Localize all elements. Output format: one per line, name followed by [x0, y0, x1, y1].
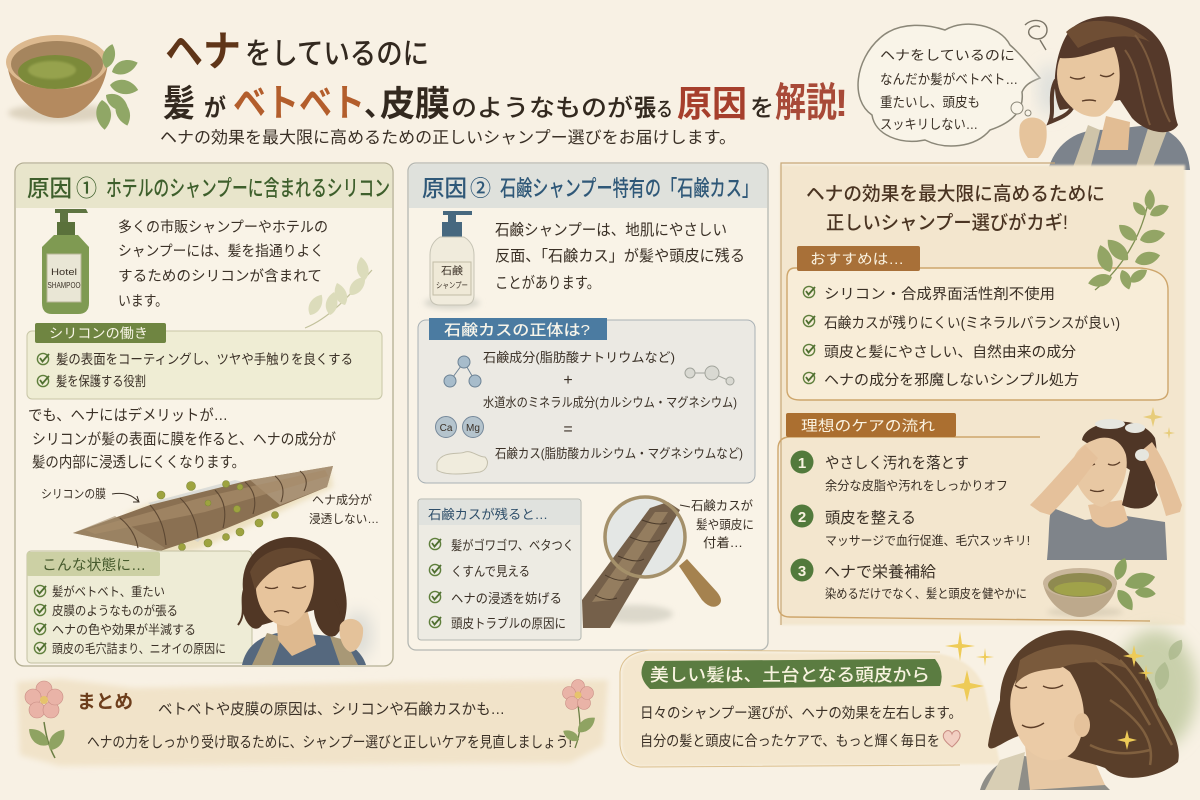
step 3: ヘナで栄養補給	[824, 563, 937, 581]
callout: not permeating	[309, 492, 379, 526]
box: symptoms: こんな状態に…	[42, 557, 146, 574]
icon: small henna bowl	[1043, 556, 1157, 617]
title: 髪	[163, 83, 195, 124]
text block: demerit	[28, 406, 336, 471]
text block: summary: ヘナの力をしっかり受け取るために、シャンプー選びと正しいケアを見直しましょう!	[87, 734, 572, 751]
icon: worried woman	[238, 537, 372, 665]
diagram: magnifying glass on hair	[582, 497, 754, 628]
tag: beautiful hair	[641, 659, 942, 689]
icon: calcium and magnesium	[436, 416, 484, 438]
callout: soap scum sticks: 付着…	[703, 535, 743, 550]
icon: henna bowl with leaves	[6, 35, 140, 130]
title	[163, 28, 848, 125]
icon: hotel shampoo bottle: SHAMPOO	[48, 281, 80, 290]
subtitle: ヘナの効果を最大限に高めるための正しいシャンプー選びをお届けします。	[160, 128, 736, 147]
formula: =	[563, 421, 573, 438]
tag: ideal care flow: 理想のケアの流れ	[801, 418, 936, 435]
step 3: 3	[798, 563, 806, 580]
icon: hotel shampoo bottle	[42, 209, 89, 314]
icon: pink flower	[25, 681, 69, 758]
heading: cause 1: ホテルのシャンプーに含まれるシリコン	[106, 176, 390, 201]
box: what soap scum is	[418, 318, 755, 483]
icon: soap scum lump	[437, 452, 487, 474]
heading: cause 1: 原因	[27, 175, 72, 201]
panel: beautiful hair message	[620, 650, 1000, 767]
list: silicone function: 髪を保護する役割	[56, 374, 146, 389]
text block: intro	[118, 218, 328, 310]
text block: summary: ベトベトや皮膜の原因は、シリコンや石鹸カスかも…	[158, 701, 505, 718]
heading: choosing shampoo: 正しいシャンプー選びがカギ!	[826, 212, 1068, 234]
text block: message: 自分の髪と頭皮に合ったケアで、もっと輝く毎日を	[640, 733, 940, 750]
thought bubble: 重たいし、頭皮も	[880, 95, 980, 110]
list: recommended: シリコン・合成界面活性剤不使用	[824, 286, 1055, 303]
list: symptoms: 頭皮の毛穴詰まり、ニオイの原因に	[52, 641, 226, 656]
list: silicone function	[37, 352, 353, 389]
title: をしているのに	[245, 38, 429, 71]
text block: intro: 多くの市販シャンプーやホテルの	[118, 218, 328, 236]
tag: beautiful hair: 美しい髪は、土台となる頭皮から	[650, 665, 930, 685]
callout: silicone film	[41, 487, 139, 502]
icon: right flower	[561, 680, 598, 748]
icon: calcium and magnesium: Mg	[466, 423, 480, 434]
tag: silicone function	[35, 323, 166, 343]
title: !	[835, 83, 848, 125]
icon: woman touching hair, worried	[1019, 16, 1190, 170]
title: 原因	[677, 83, 747, 124]
thought bubble: スッキリしない…	[880, 117, 978, 132]
text block: intro: するためのシリコンが含まれて	[118, 268, 322, 285]
text block: message: 日々のシャンプー選びが、ヘナの効果を左右します。	[640, 705, 962, 722]
icon: molecule left	[444, 356, 481, 387]
text block: soap intro: 石鹸シャンプーは、地肌にやさしい	[495, 221, 727, 239]
text block: demerit: シリコンが髪の表面に膜を作ると、ヘナの成分が	[32, 431, 336, 448]
formula: 石鹸カス(脂肪酸カルシウム・マグネシウムなど)	[495, 446, 743, 461]
box: when soap scum remains: 石鹸カスが残ると…	[428, 507, 548, 522]
formula: +	[563, 372, 573, 389]
text block: demerit: でも、ヘナにはデメリットが…	[28, 406, 228, 424]
tag: recommended: おすすめは…	[810, 251, 904, 267]
text block: demerit: 髪の内部に浸透しにくくなります。	[32, 454, 245, 471]
list: symptoms	[34, 584, 226, 656]
icon: calcium and magnesium: Ca	[440, 423, 453, 434]
text block: summary	[87, 701, 572, 751]
panel: cause 1	[15, 163, 393, 666]
thought bubble	[858, 24, 1040, 146]
callout: soap scum sticks: 髪や頭皮に	[696, 518, 754, 532]
icon: green leaf sprig	[1087, 189, 1171, 291]
title: 解説	[775, 81, 837, 125]
text block: soap intro	[495, 221, 745, 292]
heading: summary: まとめ	[77, 692, 133, 713]
icon: heart	[943, 731, 960, 747]
step 2	[790, 504, 1030, 548]
heading: choosing shampoo	[806, 183, 1105, 234]
text block: intro: います。	[118, 293, 168, 310]
title: ベトベト	[233, 83, 365, 125]
box: when soap scum remains	[418, 499, 581, 640]
step 2: マッサージで血行促進、毛穴スッキリ!	[825, 534, 1030, 548]
step 1: 余分な皮脂や汚れをしっかりオフ	[825, 478, 1008, 493]
heading: cause 1	[16, 164, 392, 208]
title: を	[750, 95, 774, 122]
text block: soap intro: ことがあります。	[495, 274, 600, 292]
step 2: 頭皮を整える	[825, 509, 916, 527]
icon: pale leaf sprig	[305, 256, 372, 328]
heading: cause 2: 原因	[422, 175, 467, 201]
list: recommended: 石鹸カスが残りにくい(ミネラルバランスが良い)	[824, 315, 1120, 332]
panel: cause 2	[408, 163, 768, 650]
step 1	[790, 450, 1008, 493]
tag: what soap scum is	[429, 318, 607, 340]
title: が	[204, 94, 226, 122]
title: 張	[634, 95, 656, 122]
callout: soap scum sticks	[680, 498, 754, 550]
list: symptoms: 髪がベトベト、重たい	[52, 584, 165, 599]
icon: soap shampoo bottle: 石鹸	[441, 264, 464, 277]
icon: woman washing hair	[1030, 407, 1182, 560]
heading: cause 2: ②	[470, 176, 491, 201]
text block: intro: シャンプーには、髪を指通りよく	[118, 243, 324, 260]
tag: recommended	[797, 246, 920, 271]
callout: not permeating: 浸透しない…	[309, 512, 379, 526]
tag: what soap scum is: 石鹸カスの正体は?	[444, 322, 590, 339]
step 3: 染めるだけでなく、髪と頭皮を健やかに	[825, 586, 1027, 601]
heading: cause 2: 石鹸シャンプー特有の「石鹸カス」	[500, 176, 758, 201]
text block: message	[640, 705, 962, 750]
icon: molecule right	[685, 366, 734, 385]
box: ideal care flow	[778, 413, 1150, 621]
title: のようなものが	[451, 95, 633, 122]
list: soap scum effects: 髪がゴワゴワ、ベタつく	[451, 538, 574, 553]
heading: cause 1: ①	[76, 175, 97, 201]
heading: cause 2	[409, 164, 767, 208]
step 1: 1	[798, 455, 806, 472]
list: symptoms: ヘナの色や効果が半減する	[52, 622, 196, 637]
title: る	[656, 99, 673, 121]
step 1: やさしく汚れを落とす	[825, 454, 969, 472]
formula: 石鹸成分(脂肪酸ナトリウムなど)	[483, 350, 675, 365]
box: silicone function	[27, 323, 382, 399]
list: silicone function: 髪の表面をコーティングし、ツヤや手触りを良くする	[56, 352, 353, 367]
diagram: hair strand with silicone coat	[41, 466, 379, 557]
heading: choosing shampoo: ヘナの効果を最大限に高めるために	[806, 183, 1105, 205]
list: soap scum effects: ヘナの浸透を妨げる	[451, 591, 562, 606]
callout: silicone film: シリコンの膜	[41, 487, 106, 501]
text block: soap intro: 反面、「石鹸カス」が髪や頭皮に残る	[495, 247, 745, 265]
tag: ideal care flow	[786, 413, 956, 437]
list: soap scum effects	[429, 538, 574, 631]
icon: hotel shampoo bottle: Hotel	[51, 267, 77, 278]
formula	[483, 350, 743, 461]
list: soap scum effects: くすんで見える	[451, 564, 530, 579]
list: symptoms: 皮膜のようなものが張る	[52, 603, 178, 618]
thought bubble: ヘナをしているのに	[880, 48, 1015, 63]
icon: soap shampoo bottle	[424, 211, 480, 309]
list: recommended: 頭皮と髪にやさしい、自然由来の成分	[824, 344, 1077, 361]
callout: soap scum sticks: 石鹸カスが	[691, 498, 753, 513]
list: soap scum effects: 頭皮トラブルの原因に	[451, 616, 566, 631]
box: symptoms	[27, 551, 252, 663]
title: 皮膜	[380, 85, 450, 124]
list: recommended: ヘナの成分を邪魔しないシンプル処方	[824, 372, 1079, 389]
panel: summary	[17, 679, 608, 766]
title: 、	[364, 90, 394, 123]
list: recommended	[803, 286, 1120, 389]
box: recommended	[787, 246, 1168, 400]
callout: not permeating: ヘナ成分が	[312, 492, 372, 507]
icon: radiant woman with flowing hair	[945, 630, 1197, 790]
icon: soap shampoo bottle: シャンプー	[436, 281, 468, 290]
step 3	[790, 558, 1027, 601]
tag: silicone function: シリコンの働き	[49, 326, 148, 341]
step 2: 2	[798, 509, 806, 526]
formula: 水道水のミネラル成分(カルシウム・マグネシウム)	[483, 395, 737, 410]
title: ヘナ	[165, 28, 241, 75]
thought bubble: なんだか髪がベトベト…	[880, 72, 1018, 87]
panel: choosing the right shampoo	[778, 163, 1185, 625]
